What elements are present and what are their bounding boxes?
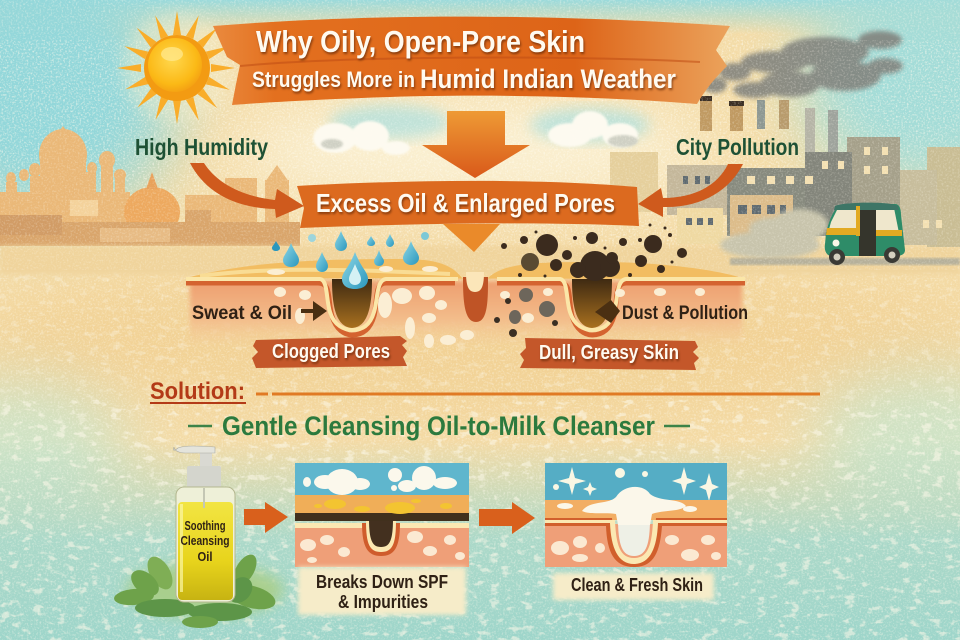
heading: Gentle Cleansing Oil-to-Milk Cleanser: Gentle Cleansing Oil-to-Milk Cleanser [222, 411, 655, 441]
label: High Humidity: High Humidity [135, 134, 268, 160]
dust cloud behind rickshaw [720, 209, 828, 259]
bottle label text [180, 518, 230, 564]
label: Dust & Pollution: Dust & Pollution [622, 303, 748, 324]
big down arrow [422, 111, 530, 178]
label plate and text: Clean & Fresh Skin: Clean & Fresh Skin [571, 575, 703, 595]
tag: Clogged Pores [252, 336, 407, 368]
title line 1: Why Oily, Open-Pore Skin [256, 24, 585, 59]
tag: Clogged Pores: Clogged Pores [272, 341, 390, 363]
heading: Solution: Solution: [150, 378, 245, 405]
bottle label text: Soothing [184, 518, 226, 533]
tag: Dull, Greasy Skin: Dull, Greasy Skin [539, 342, 679, 364]
smoke [703, 31, 903, 98]
label plate and text: Breaks Down SPF & Impurities: Breaks Down SPF [316, 572, 448, 592]
water drops [272, 231, 429, 289]
title line 2: Struggles More in [252, 67, 415, 92]
title banner [213, 17, 730, 105]
factory chimneys [700, 96, 789, 131]
arrow: dust and pollution [595, 300, 620, 323]
skin top layer [186, 259, 745, 279]
pollution stones in skin [494, 288, 558, 337]
label plate and text: Breaks Down SPF & Impurities: & Impurities [338, 592, 428, 612]
banner: excess oil and enlarged pores [297, 181, 639, 228]
product bottle: Soothing Cleansing Oil [173, 446, 235, 602]
left skyline: Indian city silhouette [0, 126, 300, 246]
skin surface outline [186, 279, 745, 335]
arrow: sweat and oil [301, 301, 327, 321]
skin dermis [190, 281, 742, 350]
panel: breaks down SPF [295, 463, 469, 567]
label: City Pollution: City Pollution [676, 134, 799, 160]
leaves under bottle [113, 551, 283, 628]
panel: clean and fresh skin [545, 463, 727, 567]
label plate and text: Breaks Down SPF & Impurities [298, 567, 466, 615]
right skyline: factories and buildings [610, 108, 960, 247]
arrow: bottle to step one [244, 502, 288, 533]
skin cross-section [186, 259, 745, 350]
banner: excess oil and enlarged pores: Excess Oil & Enlarged Pores [316, 188, 615, 218]
label plate and text: Clean & Fresh Skin [553, 573, 714, 600]
sun icon [97, 0, 258, 148]
soot and pollution particles [501, 224, 687, 281]
tag: Dull, Greasy Skin [520, 338, 699, 370]
arrow: humidity to excess oil [190, 163, 304, 218]
bottle label text: Cleansing [180, 533, 230, 548]
pore fills [332, 272, 612, 328]
sand ground band [0, 246, 960, 274]
label: Sweat & Oil: Sweat & Oil [192, 303, 292, 324]
fat cells [267, 266, 705, 348]
title line 2: Humid Indian Weather [420, 64, 676, 94]
title line 2 [252, 64, 676, 94]
arrow: step one to step two [479, 502, 535, 534]
bottle label text: Oil [198, 549, 212, 564]
clouds and sky patch, centre [313, 105, 650, 155]
small down arrow [443, 224, 500, 252]
auto rickshaw [825, 203, 905, 265]
arrow: pollution to excess oil [638, 164, 743, 217]
road [730, 258, 960, 265]
